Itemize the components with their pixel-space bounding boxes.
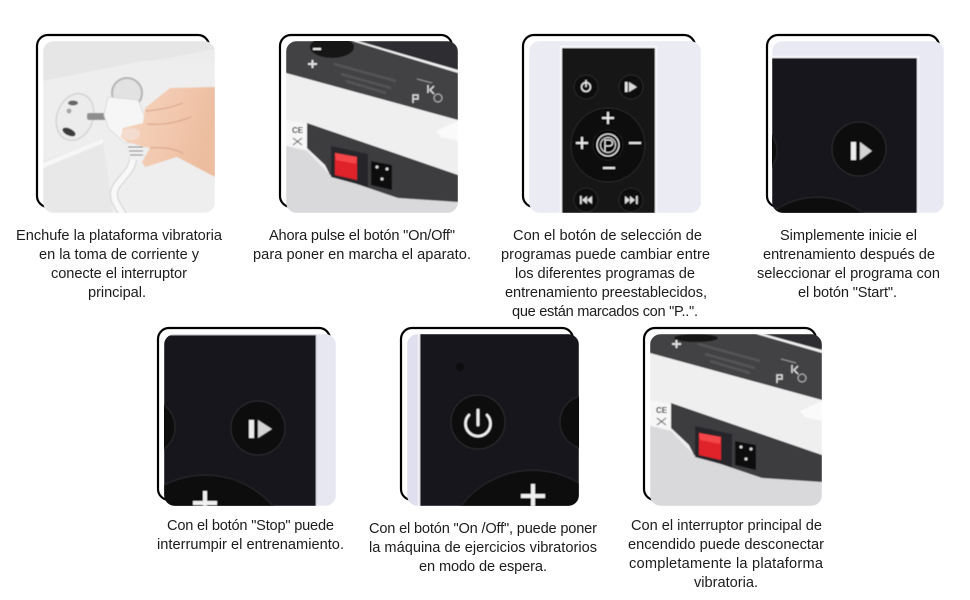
caption: standby step: Con el botón "On /Off", puede poner [369, 521, 597, 537]
photo: device console with red switch [650, 334, 822, 506]
panel: main switch step [628, 328, 824, 591]
panel: on/off step [253, 35, 471, 263]
caption: stop step [157, 518, 344, 553]
caption: program selection step: que están marcados con "P..". [512, 304, 698, 320]
caption: program selection step: Con el botón de selección de [513, 228, 702, 244]
caption: standby step: en modo de espera. [419, 559, 547, 575]
caption: program selection step: entrenamiento preestablecidos, [505, 285, 707, 301]
caption: start step [757, 228, 940, 301]
photo: start button close-up [772, 41, 944, 213]
caption: main switch step [628, 518, 824, 591]
caption: standby step [369, 521, 597, 575]
caption: plug in step: conecte el interruptor [51, 266, 187, 282]
caption: standby step: la máquina de ejercicios vibratorios [369, 540, 597, 556]
panel: start step [757, 34, 944, 297]
caption: on/off step: para poner en marcha el aparato. [253, 247, 471, 263]
photo: power button close-up [407, 334, 579, 506]
caption: plug in step [16, 228, 223, 301]
photo: device console with red switch: CE [656, 406, 668, 415]
photo: hand plugging into wall socket [43, 41, 215, 215]
caption: start step: el botón "Start". [798, 285, 897, 301]
caption: on/off step [253, 228, 471, 263]
photo: device console with red switch [286, 36, 458, 213]
photo: device console with red switch: CE [292, 126, 304, 135]
caption: main switch step: Con el interruptor principal de [631, 518, 822, 534]
caption: program selection step [501, 228, 710, 320]
caption: start step: Simplemente inicie el [780, 228, 917, 244]
caption: stop step: interrumpir el entrenamiento. [157, 537, 344, 553]
panel: standby step [369, 328, 614, 575]
panel: program selection step [501, 35, 710, 320]
caption: program selection step: los diferentes programas de [515, 266, 695, 282]
caption: plug in step: principal. [88, 285, 146, 301]
caption: plug in step: en la toma de corriente y [39, 247, 200, 263]
photo: stop button close-up [164, 334, 336, 506]
caption: on/off step: Ahora pulse el botón "On/Off" [269, 228, 455, 244]
caption: program selection step: programas puede cambiar entre [501, 247, 710, 263]
caption: plug in step: Enchufe la plataforma vibratoria [16, 228, 223, 244]
caption: start step: seleccionar el programa con [757, 266, 940, 282]
caption: stop step: Con el botón "Stop" puede [167, 518, 334, 534]
photo: full remote control [529, 41, 701, 213]
caption: main switch step: encendido puede desconectar [628, 537, 824, 553]
caption: main switch step: completamente la plataforma [629, 556, 824, 572]
panel: plug in step [16, 35, 223, 301]
caption: start step: entrenamiento después de [763, 247, 935, 263]
panel: stop step [156, 326, 343, 552]
caption: main switch step: vibratoria. [694, 575, 758, 591]
